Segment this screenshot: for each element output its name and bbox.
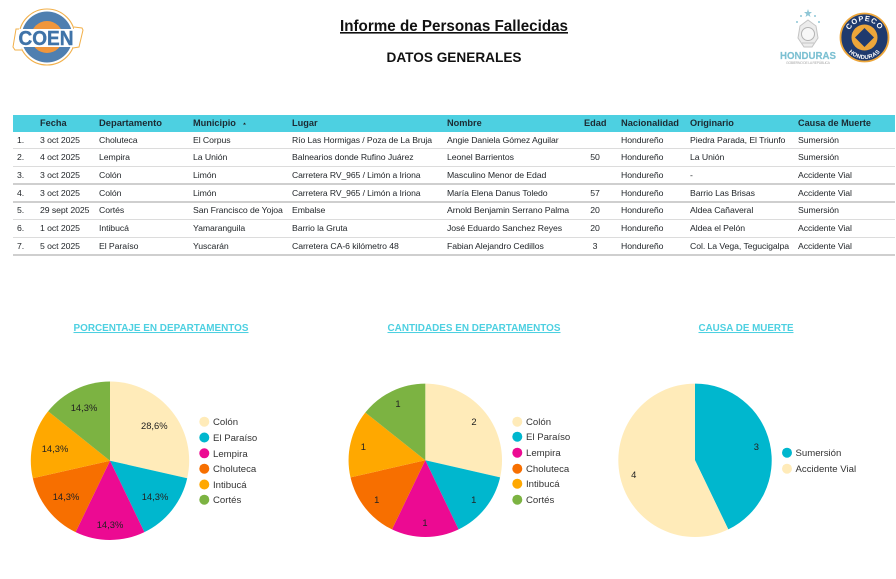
table row 6: Aldea el Pelón [690,223,745,233]
table row 2: Sumersión [798,152,839,162]
table row 7: Accidente Vial [798,241,852,251]
table row 7: 5 oct 2025 [40,241,80,251]
table row 7: Yuscarán [193,241,229,251]
table row 7: Col. La Vega, Tegucigalpa [690,241,789,251]
table row 1 [17,135,839,145]
table row 6: Hondureño [621,223,664,233]
legend: porcentaje: Colón [213,417,238,428]
legend: porcentaje: Choluteca [213,464,257,475]
table row 5: Cortés [99,205,125,215]
chart: causa de muerte pie: 3 [754,441,759,452]
table row 4 [17,188,852,198]
heading: porcentaje en departamentos: PORCENTAJE EN DEPARTAMENTOS [74,323,249,334]
table row 2: 4 oct 2025 [40,152,80,162]
chart: cantidades pie: 1 [374,494,379,505]
table row 3: Hondureño [621,170,664,180]
logo: COPECO [840,12,890,62]
table row 1: Angie Daniela Gómez Aguilar [447,135,559,145]
table row 5: Sumersión [798,205,839,215]
table header: Fecha [40,118,67,128]
logo: COPECO: HONDURAS [849,50,880,59]
subtitle: DATOS GENERALES [386,49,522,65]
legend: causa de muerte: Accidente Vial [796,464,856,475]
table header: Originario [690,118,734,128]
table row 2: 2. [17,152,24,162]
chart: porcentaje pie: 14,3% [142,491,168,502]
chart: cantidades pie: 2 [471,416,477,427]
legend: porcentaje: Lempira [213,449,248,460]
table row 7: 7. [17,241,24,251]
table row 7: Carretera CA-6 kilómetro 48 [292,241,399,251]
chart: cantidades pie: 1 [395,398,401,409]
table row 2: La Unión [690,152,724,162]
table row 5: San Francisco de Yojoa [193,205,283,215]
table header: Nacionalidad [621,118,679,128]
chart: cantidades pie: 1 [471,494,476,505]
table row 2: Lempira [99,152,130,162]
table row 4: Barrio Las Brisas [690,188,756,198]
legend: causa de muerte [782,448,856,475]
table row 6 [17,223,852,233]
chart: porcentaje pie: 14,3% [42,443,68,454]
table row 1: Piedra Parada, El Triunfo [690,135,786,145]
table row 6: José Eduardo Sanchez Reyes [447,223,563,233]
chart: porcentaje pie [31,382,189,540]
table row 4: Hondureño [621,188,664,198]
logo: COEN: COEN [18,28,74,50]
table row 2: Leonel Barrientos [447,152,515,162]
legend: porcentaje: El Paraíso [213,433,257,444]
table row 3: - [690,170,693,180]
table row 5: Hondureño [621,205,664,215]
heading: causa de muerte: CAUSA DE MUERTE [698,323,794,334]
table header: Lugar [292,118,318,128]
title: Informe de Personas Fallecidas [340,18,568,35]
table row 6: 20 [590,223,600,233]
table row 1: El Corpus [193,135,231,145]
chart: porcentaje pie: 28,6% [141,420,168,431]
table header: Nombre [447,118,482,128]
legend: cantidades: Lempira [526,448,561,459]
legend: porcentaje [199,417,257,506]
table row 3: Carretera RV_965 / Limón a Iriona [292,170,421,180]
chart: cantidades pie: 1 [422,517,428,528]
logo: COPECO: COPECO [846,16,882,29]
logo: COEN [13,9,83,65]
table header: Edad [584,118,606,128]
table row 5: 20 [590,205,600,215]
chart: causa de muerte pie: 4 [631,469,636,480]
legend: porcentaje: Cortés [213,495,241,506]
logo: Honduras: GOBIERNO DE LA REPÚBLICA [786,61,831,65]
table header: Departamento [99,118,162,128]
legend: cantidades: El Paraíso [526,432,570,443]
table [13,115,895,256]
table row 6: 6. [17,223,24,233]
chart: cantidades pie [349,384,502,537]
table row 2: Balnearios donde Rufino Juárez [292,152,414,162]
table row 2: Hondureño [621,152,664,162]
table row 3: Limón [193,170,217,180]
legend: cantidades: Colón [526,417,551,428]
table row 4: Carretera RV_965 / Limón a Iriona [292,188,421,198]
table header: Municipio [193,118,236,128]
table row 3: Masculino Menor de Edad [447,170,547,180]
logo: Honduras: HONDURAS [780,51,836,62]
table row 7: El Paraíso [99,241,139,251]
table row 3: 3 oct 2025 [40,170,80,180]
heading: cantidades en departamentos: CANTIDADES EN DEPARTAMENTOS [388,323,561,334]
table row 1: Sumersión [798,135,839,145]
logo: Honduras [780,9,836,65]
table row 4: 4. [17,188,24,198]
table row 6: Yamaranguila [193,223,245,233]
table row 7: Fabian Alejandro Cedillos [447,241,544,251]
table row 4: Limón [193,188,217,198]
table row 3: 3. [17,170,24,180]
table row 5 [17,205,839,215]
table row 3: Accidente Vial [798,170,852,180]
table row 5: 29 sept 2025 [40,205,90,215]
table row 1: Choluteca [99,135,138,145]
chart: cantidades pie: 1 [361,441,366,452]
table row 7: 3 [593,241,598,251]
legend: cantidades: Intibucá [526,479,560,490]
table row 2 [17,152,839,162]
legend: cantidades: Choluteca [526,464,570,475]
legend: porcentaje: Intibucá [213,480,247,491]
table row 2: 50 [590,152,600,162]
table row 7 [17,241,852,251]
table row 6: Intibucá [99,223,129,233]
table row 7: Hondureño [621,241,664,251]
table row 1: Hondureño [621,135,664,145]
table row 6: Barrio la Gruta [292,223,348,233]
table header: Causa de Muerte [798,118,871,128]
table row 1: Río Las Hormigas / Poza de La Bruja [292,135,432,145]
table row 5: 5. [17,205,24,215]
legend: causa de muerte: Sumersión [796,448,841,459]
table row 1: 1. [17,135,24,145]
table row 4: Colón [99,188,122,198]
legend: cantidades: Cortés [526,495,554,506]
table row 6: Accidente Vial [798,223,852,233]
table row 4: María Elena Danus Toledo [447,188,548,198]
chart: porcentaje pie: 14,3% [53,491,79,502]
table row 1: 3 oct 2025 [40,135,80,145]
chart: porcentaje pie: 14,3% [97,519,123,530]
chart: porcentaje pie: 14,3% [71,402,97,413]
table row 4: 57 [590,188,600,198]
legend: cantidades [512,417,570,506]
chart: causa de muerte pie [618,384,772,537]
table row 4: Accidente Vial [798,188,852,198]
table header [13,115,895,132]
table row 2: La Unión [193,152,227,162]
table row 5: Aldea Cañaveral [690,205,753,215]
table row 3 [17,170,852,180]
table row 4: 3 oct 2025 [40,188,80,198]
table row 3: Colón [99,170,122,180]
table row 5: Arnold Benjamin Serrano Palma [447,205,569,215]
table row 6: 1 oct 2025 [40,223,80,233]
table row 5: Embalse [292,205,326,215]
